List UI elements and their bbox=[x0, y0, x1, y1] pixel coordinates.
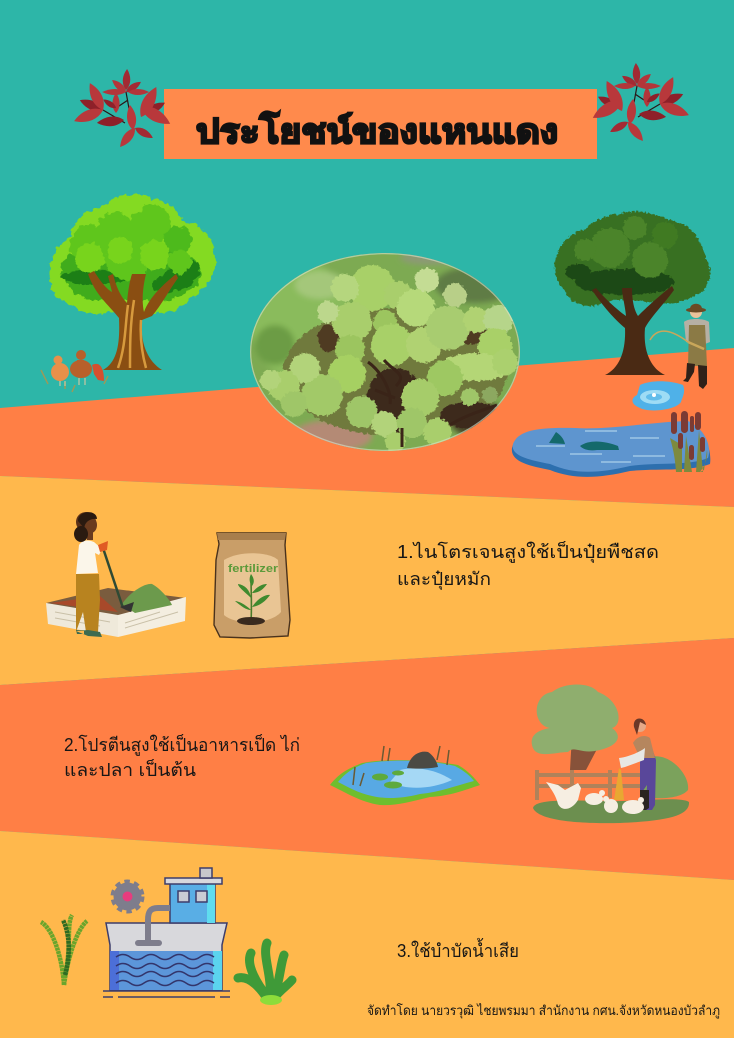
text: item 2: และปลา เป็นต้น bbox=[64, 758, 196, 780]
fronds bbox=[260, 265, 518, 452]
woman bbox=[74, 512, 134, 637]
title banner bbox=[164, 89, 597, 159]
illustration: dark green tree, fisherman and pond bbox=[512, 212, 710, 477]
compost box bbox=[46, 584, 186, 637]
text: item 3: 3.ใช้บำบัดน้ำเสีย bbox=[397, 938, 519, 961]
ground lines bbox=[103, 991, 230, 997]
illustration: water treatment tank bbox=[103, 868, 230, 997]
band: orange row 2 bbox=[0, 638, 734, 880]
waves bbox=[116, 954, 214, 986]
illustration: fertilizer bag bbox=[214, 533, 290, 638]
blurred backdrop bbox=[250, 251, 515, 452]
title: ประโยชน์ของแหนแดง bbox=[196, 111, 558, 151]
illustration: farm woman feeding ducks bbox=[532, 684, 689, 823]
tank bbox=[106, 923, 227, 990]
fronds shade under bbox=[283, 308, 507, 436]
band: orange top bbox=[0, 348, 734, 507]
bag label: fertilizer bbox=[228, 563, 279, 575]
dark tree canopy bbox=[555, 212, 710, 306]
band: yellow row 3 bbox=[0, 831, 734, 1038]
lake bbox=[512, 421, 710, 477]
fence bbox=[536, 770, 640, 800]
fisherman bbox=[650, 304, 710, 389]
small pond bbox=[632, 381, 684, 410]
icon: seaweed right bbox=[238, 943, 292, 1005]
seedling bbox=[235, 574, 270, 625]
icon: seaweed left bbox=[41, 915, 87, 985]
cattails bbox=[670, 411, 707, 472]
building bbox=[165, 868, 222, 923]
text: item 1: 1.ไนโตรเจนสูงใช้เป็นปุ๋ยพืชสด bbox=[397, 540, 659, 563]
text: item 2 bbox=[64, 733, 300, 780]
ducks bbox=[546, 782, 644, 814]
pipe bbox=[148, 908, 170, 942]
photo: azolla bbox=[249, 251, 521, 452]
dark tree trunk bbox=[592, 286, 674, 375]
brown roots bbox=[368, 360, 497, 447]
farmer woman bbox=[614, 718, 656, 810]
farm ground bbox=[533, 799, 689, 823]
gear bbox=[114, 882, 142, 910]
illustration: woman composting bbox=[46, 512, 186, 637]
farm tree bbox=[532, 684, 688, 798]
text: item 2: 2.โปรตีนสูงใช้เป็นอาหารเป็ด ไก่ bbox=[64, 733, 300, 756]
tree canopy bbox=[50, 194, 216, 314]
chickens bbox=[41, 350, 108, 392]
icon: red leaves right bbox=[590, 63, 691, 144]
illustration: lily pond bbox=[330, 746, 480, 805]
icon: red leaves left bbox=[72, 69, 173, 150]
illustration: bright green tree with chickens bbox=[41, 194, 216, 392]
tree trunk bbox=[88, 271, 178, 370]
text: item 1: และปุ๋ยหมัก bbox=[397, 569, 491, 590]
text: item 1 bbox=[397, 540, 659, 590]
band: yellow row 1 bbox=[0, 476, 734, 685]
